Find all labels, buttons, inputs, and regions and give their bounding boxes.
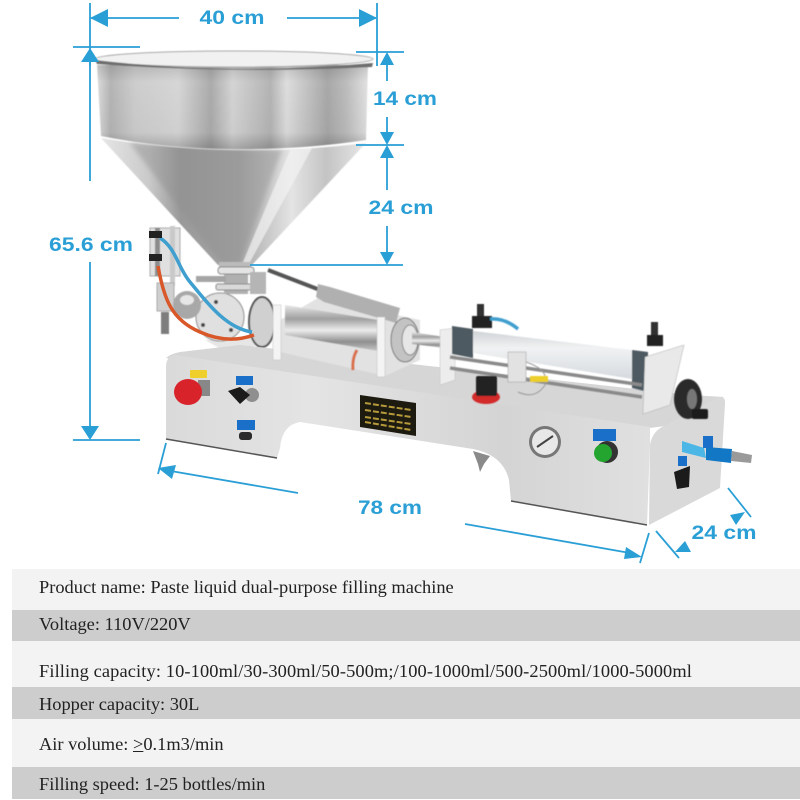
bracket left: [273, 305, 281, 360]
dimension: length 78 cm: [158, 443, 649, 563]
row: product name: Product name: Paste liquid dual-purpose filling machine: [39, 577, 454, 597]
label: depth 24 cm: 24 cm: [692, 523, 756, 544]
row: hopper capacity: [12, 687, 800, 719]
filling head and nozzle: [150, 226, 275, 352]
hopper cylinder: [97, 65, 368, 149]
piston rod: [412, 332, 445, 348]
dimension: depth 24 cm: [656, 488, 756, 558]
pressure regulator: [472, 390, 500, 404]
clamp: [249, 297, 275, 347]
label: 65.6 cm: 65.6 cm: [49, 235, 133, 256]
base block: [205, 336, 260, 352]
front controls: [174, 370, 752, 489]
pressure gauge: [529, 426, 561, 458]
air inlet fitting: [682, 436, 752, 463]
dimension: height 65.6 cm: [49, 47, 140, 440]
row: filling capacity: Filling capacity: 10-100ml/30-300ml/50-500m;/100-1000ml/500-2500ml/1000-5000ml: [39, 661, 692, 681]
specification table: [12, 569, 800, 799]
flange: [391, 318, 419, 362]
nameplate: [360, 395, 416, 436]
row: voltage: Voltage: 110V/220V: [39, 614, 191, 634]
rear supports: [280, 298, 420, 376]
hopper rim: [95, 51, 373, 70]
guide rods: [450, 357, 642, 397]
air tubes: [149, 231, 254, 339]
left bracket: [440, 328, 455, 385]
feed cylinder assembly: [268, 270, 445, 377]
label: 24 cm: 24 cm: [368, 198, 434, 219]
orange feed tube: [353, 350, 357, 370]
front panel: [166, 355, 650, 525]
row: filling speed: Filling speed: 1-25 bottles/min: [39, 774, 265, 794]
row: air volume: [12, 719, 800, 767]
air port: [237, 420, 255, 440]
sensor block: [508, 352, 526, 382]
dimension: cone height 24 cm: [250, 145, 434, 265]
valve body: [173, 267, 266, 341]
air cylinder assembly: [440, 304, 708, 419]
panel bottom shadow: [166, 439, 647, 525]
emergency stop button: [174, 370, 210, 405]
top surface: [166, 345, 724, 428]
yellow tag: [530, 376, 548, 382]
row: hopper capacity: Hopper capacity: 30L: [39, 694, 199, 714]
cylinder: [473, 331, 632, 379]
dimension: cylinder height 14 cm: [356, 52, 437, 145]
right bracket: [643, 345, 684, 414]
drain fitting: [473, 451, 490, 472]
machine illustration with dimensions: [49, 3, 756, 564]
nozzle pneumatic cylinder: [150, 226, 180, 334]
hopper cone: [101, 138, 366, 265]
hopper outlet: [219, 262, 251, 270]
label: 78 cm: 78 cm: [358, 498, 422, 519]
hand wheel: [674, 379, 702, 419]
row: air volume: Air volume: >0.1m3/min: [39, 734, 224, 754]
selector switch: [228, 376, 259, 404]
top fittings: [472, 316, 492, 328]
green power button: [593, 429, 618, 463]
row: product name: [12, 569, 800, 610]
barrel: [285, 305, 378, 351]
bracket right: [377, 317, 385, 377]
row: voltage: [12, 610, 800, 641]
label: 14 cm: 14 cm: [373, 89, 437, 110]
side panel: [649, 397, 725, 525]
hopper: [95, 51, 373, 270]
row: filling capacity: [12, 641, 800, 687]
angled rod: [268, 270, 320, 290]
row: filling speed: [12, 767, 800, 799]
dimension: width 40 cm: [90, 3, 377, 66]
label: 40 cm: 40 cm: [200, 8, 264, 29]
angled cylinder: [316, 284, 400, 323]
machine base: [166, 345, 725, 525]
dark end cap: [632, 350, 648, 392]
power socket: [674, 456, 690, 489]
